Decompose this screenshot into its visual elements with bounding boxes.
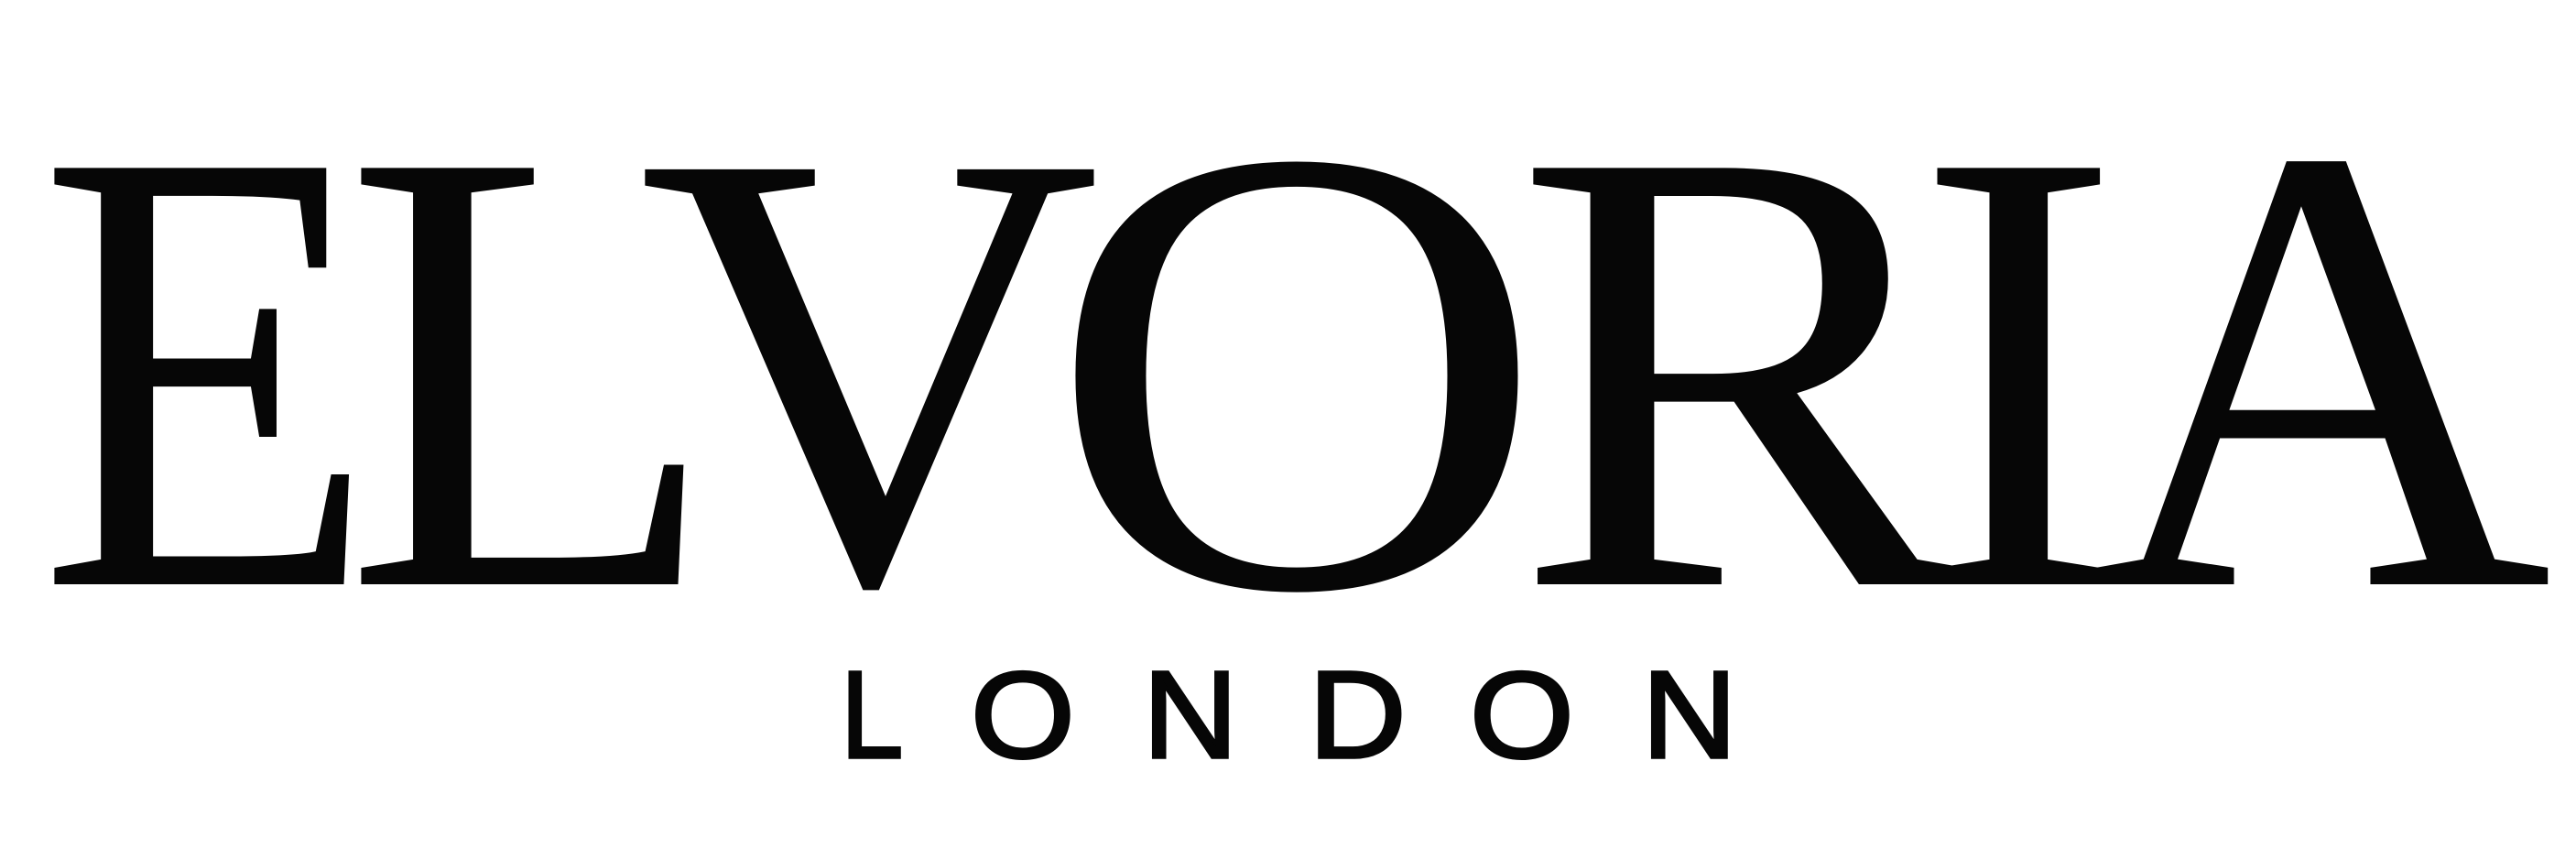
wordmark: ELVORIA: V [637,20,1101,716]
tagline: LONDON: N [1143,646,1238,784]
wordmark: ELVORIA: O [1048,16,1546,725]
wordmark: ELVORIA: R [1514,18,1970,723]
tagline: LONDON: O [1470,647,1574,784]
tagline: LONDON: O [971,647,1075,784]
tagline: LONDON: D [1309,647,1407,785]
tagline: LONDON: N [1642,646,1737,784]
tagline: LONDON [841,646,1737,785]
tagline: LONDON: L [841,647,903,784]
wordmark: ELVORIA: L [343,18,721,723]
wordmark: ELVORIA: I [1915,18,2122,723]
wordmark: ELVORIA: A [2090,14,2552,723]
wordmark: ELVORIA: E [38,17,376,722]
